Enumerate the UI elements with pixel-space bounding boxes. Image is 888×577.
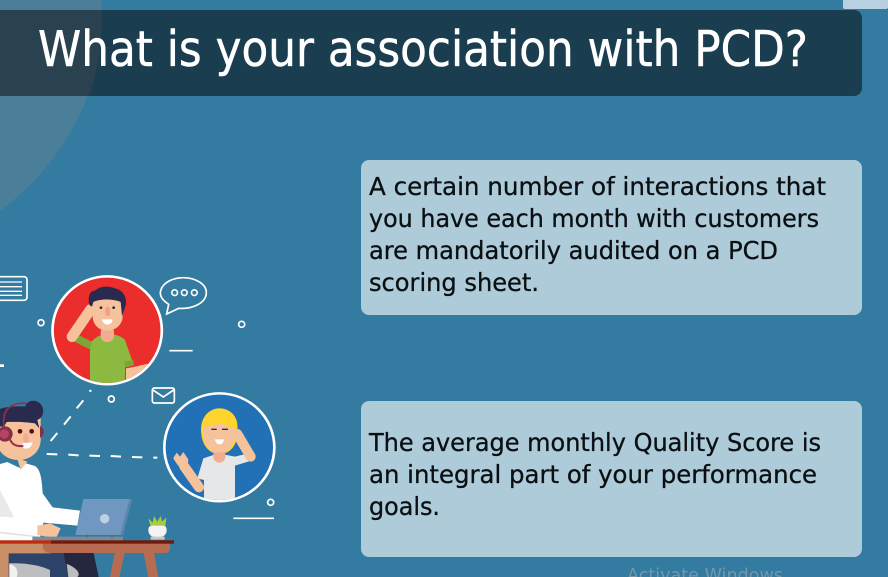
icon: speech bubble xyxy=(160,278,206,314)
dashed connector lines xyxy=(47,390,157,458)
text panel: audited interactions: scoring sheet. xyxy=(369,268,539,297)
plant pot xyxy=(148,516,167,540)
customer avatar: woman on blue xyxy=(163,392,276,502)
customer avatar: man on red xyxy=(51,275,163,385)
laptop xyxy=(32,499,132,541)
agent head with headset xyxy=(0,401,44,460)
desk xyxy=(0,540,174,577)
text panel: quality score xyxy=(361,401,862,557)
agent legs xyxy=(8,552,99,577)
text panel: audited interactions: you have each month with customers xyxy=(369,204,819,233)
text panel: quality score: goals. xyxy=(369,492,440,521)
text panel: audited interactions: are mandatorily audited on a PCD xyxy=(369,236,778,265)
decorative corner circle xyxy=(0,0,102,211)
title banner xyxy=(0,10,862,96)
icon: envelope xyxy=(152,388,174,403)
agent chair xyxy=(9,563,79,577)
text panel: audited interactions xyxy=(361,160,862,315)
title banner: What is your association with PCD? xyxy=(38,21,808,78)
text panel: quality score: an integral part of your performance xyxy=(369,460,817,489)
text panel: audited interactions: A certain number of interactions that xyxy=(369,172,826,201)
decorative line icons xyxy=(0,277,274,518)
icon: document xyxy=(0,277,27,300)
agent body xyxy=(0,450,80,540)
illustration: call centre agent and customers xyxy=(0,275,276,577)
top right window fragment xyxy=(843,0,888,9)
text panel: quality score: The average monthly Quality Score is xyxy=(368,428,821,457)
